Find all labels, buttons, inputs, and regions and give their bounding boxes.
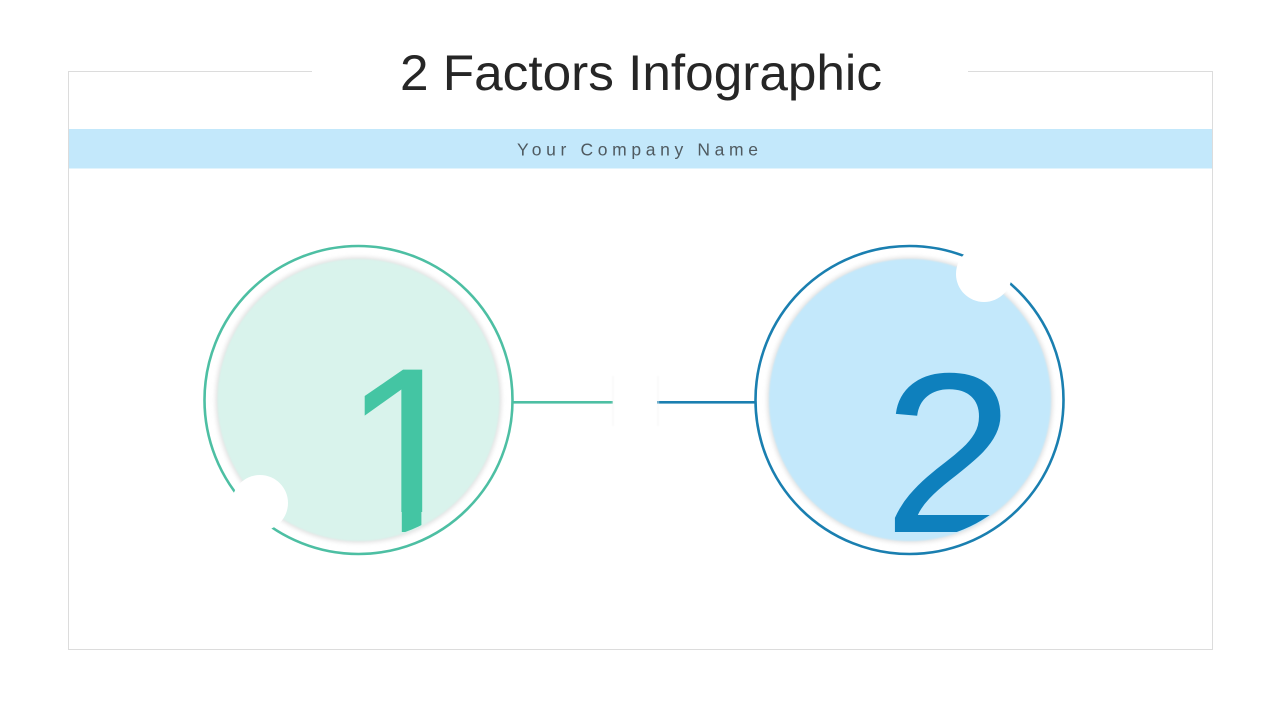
subtitle: Your Company Name [517,140,758,160]
ring 1 [204,246,512,554]
title: 2 Factors Infographic [400,45,882,101]
company name band [69,129,1212,168]
notch 2 [956,246,1012,302]
factor 2 circle [756,246,1064,581]
inner disc 1 [218,259,500,541]
connector line: green [513,401,613,404]
inner disc 2 [769,259,1051,541]
outer frame [68,66,1212,650]
factor 1 circle [204,246,512,583]
numeral 2: 2 [883,326,1015,581]
inner disc shadow 1 [216,257,502,543]
inner disc shadow 2 [767,257,1053,543]
numeral 1: 1 [342,319,473,583]
notch 1 [232,475,288,531]
connector line: blue [657,401,756,404]
connector gap [612,376,658,426]
ring 2 [756,246,1064,554]
